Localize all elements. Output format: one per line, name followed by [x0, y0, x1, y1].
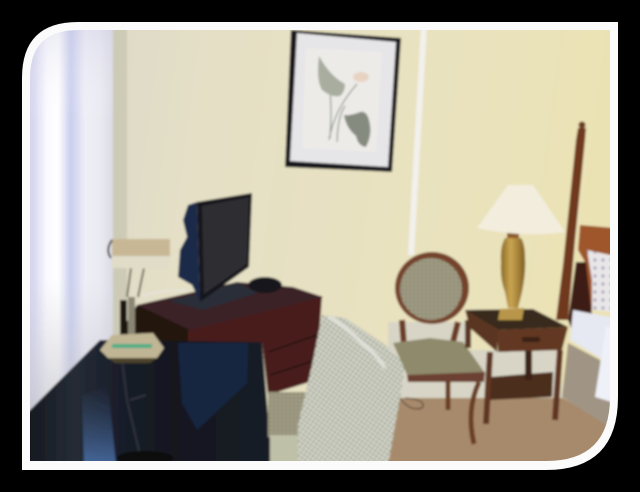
framed botanical picture [285, 30, 401, 172]
desk lamp [100, 239, 170, 363]
curtain [25, 25, 113, 415]
dresser [120, 282, 323, 395]
set-top box [248, 277, 282, 293]
bloom [353, 72, 369, 82]
white sheet [594, 329, 610, 403]
bed mattress [569, 308, 610, 359]
tv reflection [178, 343, 248, 430]
lower wall and baseboard [388, 322, 562, 400]
window sheen [82, 385, 116, 465]
table lamp [477, 185, 565, 320]
tv stand [171, 284, 256, 310]
floor [388, 396, 606, 461]
lamp reflection [122, 360, 146, 455]
flower stems [329, 84, 357, 142]
upper leaf [318, 56, 345, 96]
black glossy desk [25, 340, 272, 465]
pillow [587, 250, 615, 312]
tv [178, 193, 252, 302]
headboard [578, 225, 615, 310]
wall corner strip [112, 25, 127, 345]
power cord [400, 398, 423, 409]
wall [124, 30, 610, 412]
bed post [556, 122, 586, 320]
side table [465, 309, 568, 424]
white wall pillar edge [408, 25, 427, 255]
bed skirt [561, 342, 610, 424]
oval-back chair [393, 252, 485, 444]
cable [142, 290, 186, 296]
lower leaf [344, 112, 370, 147]
armchair foreground [268, 315, 405, 465]
